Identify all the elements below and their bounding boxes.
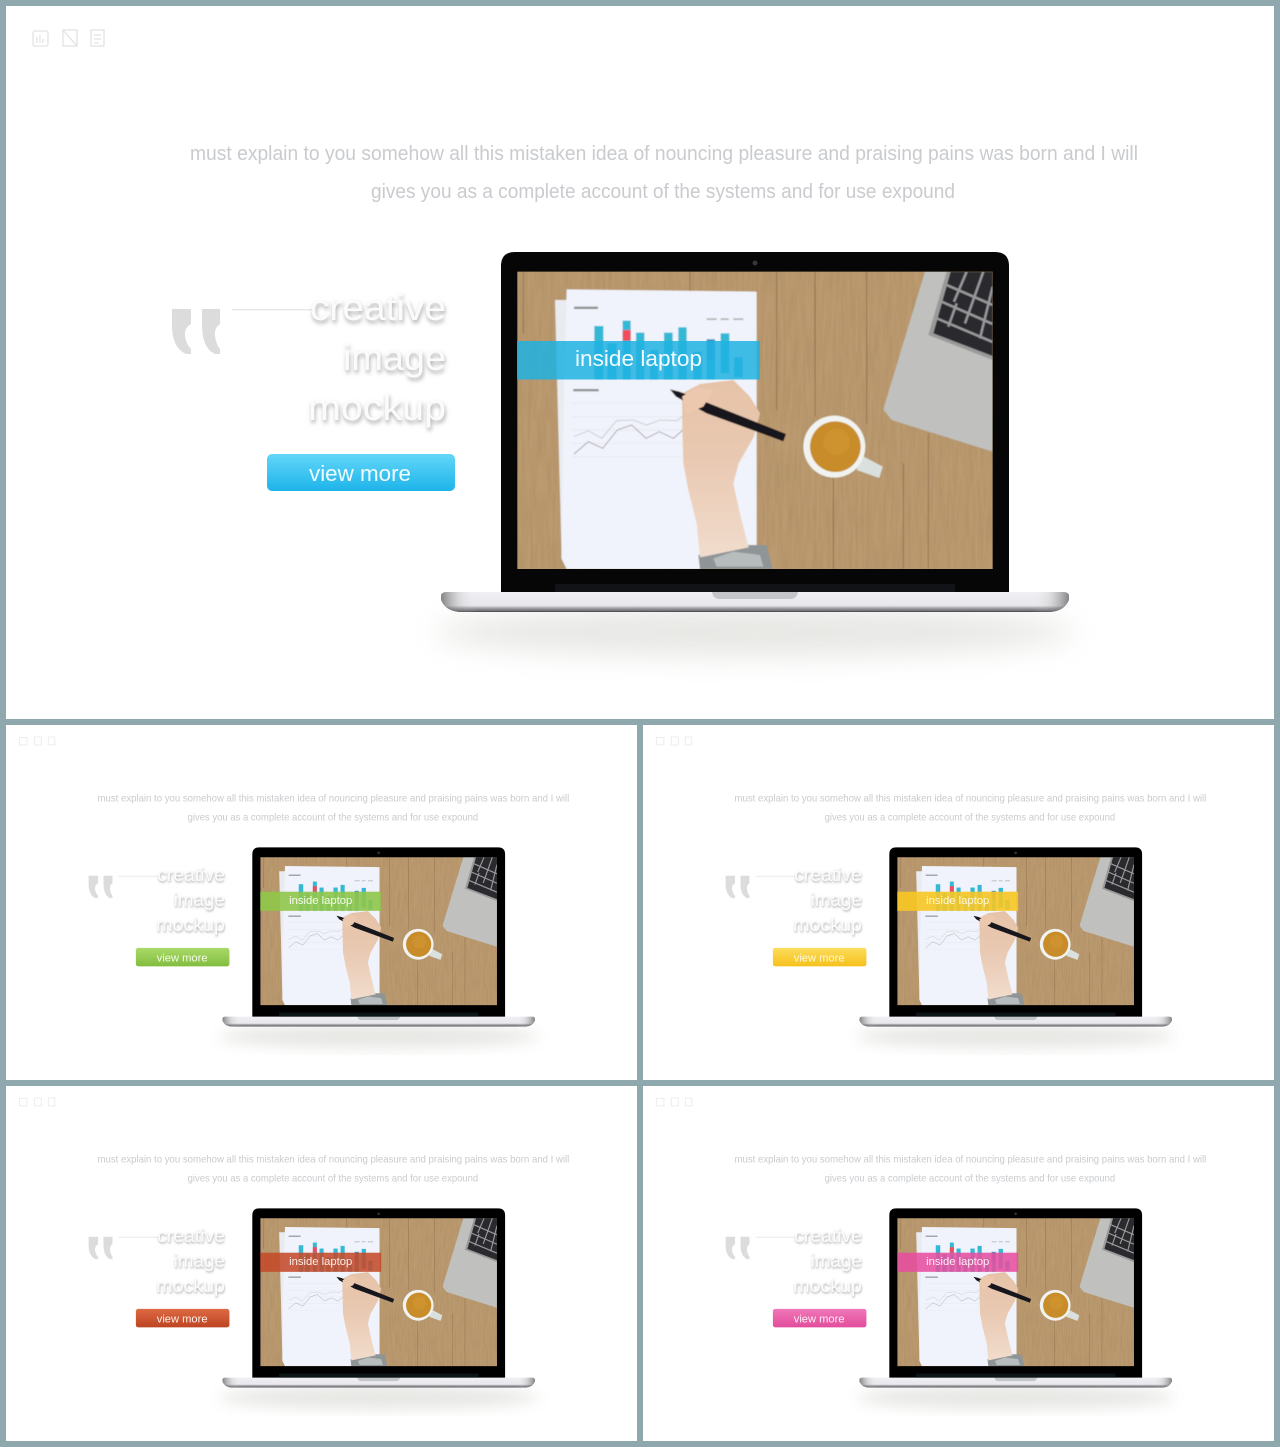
laptop mockup [219, 1208, 538, 1409]
button: view more [136, 1309, 229, 1327]
panel: yellow slide [643, 725, 1274, 1080]
button: view more: view more [309, 461, 411, 486]
button: view more: view more [794, 952, 845, 964]
panel: pink slide [643, 1086, 1274, 1441]
heading: creative [157, 1225, 225, 1246]
icon: quote mark [89, 876, 112, 898]
panel: main blue slide [6, 6, 1274, 719]
icon: quote mark [726, 1237, 749, 1259]
intro text: must explain to you somehow all this mistaken idea of nouncing pleasure and praising pains was born and I will [735, 1155, 1206, 1166]
heading: mockup [793, 914, 862, 935]
intro text: gives you as a complete account of the systems and for use expound [371, 180, 955, 203]
intro text: must explain to you somehow all this mistaken idea of nouncing pleasure and praising pains was born and I will [190, 142, 1138, 165]
button: view more [773, 948, 866, 966]
laptop mockup [435, 252, 1075, 656]
heading [156, 1225, 225, 1296]
heading: image [174, 1250, 225, 1271]
photo caption band [260, 1253, 381, 1272]
photo caption band [897, 1253, 1018, 1272]
heading: mockup [156, 914, 225, 935]
heading: creative [794, 1225, 862, 1246]
heading connector line [232, 309, 312, 310]
icon row [19, 1098, 55, 1106]
intro text: gives you as a complete account of the systems and for use expound [825, 813, 1116, 824]
heading: mockup [793, 1275, 862, 1296]
heading: image [343, 337, 446, 378]
photo caption band [897, 892, 1018, 911]
laptop mockup [856, 847, 1175, 1048]
heading: creative [794, 864, 862, 885]
heading connector line [118, 1236, 158, 1239]
heading connector line [755, 875, 795, 878]
heading [793, 864, 862, 935]
intro text: gives you as a complete account of the systems and for use expound [188, 813, 479, 824]
button: view more [267, 454, 455, 491]
intro text: gives you as a complete account of the systems and for use expound [825, 1174, 1116, 1185]
photo caption band: inside laptop [926, 1256, 989, 1268]
heading: image [811, 889, 862, 910]
heading connector line [118, 875, 158, 878]
icon row [656, 1098, 692, 1106]
heading [156, 864, 225, 935]
panel: red slide [6, 1086, 637, 1441]
icon: quote mark [172, 309, 220, 354]
heading: image [174, 889, 225, 910]
heading: creative [310, 287, 446, 328]
intro text [190, 142, 1138, 203]
heading [308, 287, 446, 428]
intro text [735, 1155, 1206, 1185]
button: view more: view more [794, 1313, 845, 1325]
intro text [98, 794, 569, 824]
intro text: must explain to you somehow all this mistaken idea of nouncing pleasure and praising pains was born and I will [98, 794, 569, 805]
button: view more [136, 948, 229, 966]
intro text: gives you as a complete account of the systems and for use expound [188, 1174, 479, 1185]
photo caption band [517, 341, 760, 380]
photo caption band: inside laptop [926, 895, 989, 907]
icon row [19, 737, 55, 745]
icon: quote mark [89, 1237, 112, 1259]
photo caption band: inside laptop [575, 346, 702, 371]
icon row [656, 737, 692, 745]
panel: green slide [6, 725, 637, 1080]
photo caption band: inside laptop [289, 1256, 352, 1268]
photo caption band [260, 892, 381, 911]
heading: image [811, 1250, 862, 1271]
intro text: must explain to you somehow all this mistaken idea of nouncing pleasure and praising pains was born and I will [735, 794, 1206, 805]
heading: mockup [156, 1275, 225, 1296]
intro text [98, 1155, 569, 1185]
button: view more: view more [157, 952, 208, 964]
intro text: must explain to you somehow all this mistaken idea of nouncing pleasure and praising pains was born and I will [98, 1155, 569, 1166]
heading [793, 1225, 862, 1296]
laptop mockup [856, 1208, 1175, 1409]
icon: quote mark [726, 876, 749, 898]
heading connector line [755, 1236, 795, 1239]
heading: creative [157, 864, 225, 885]
heading: mockup [308, 387, 446, 428]
icon row [33, 30, 104, 46]
button: view more: view more [157, 1313, 208, 1325]
intro text [735, 794, 1206, 824]
button: view more [773, 1309, 866, 1327]
photo caption band: inside laptop [289, 895, 352, 907]
laptop mockup [219, 847, 538, 1048]
